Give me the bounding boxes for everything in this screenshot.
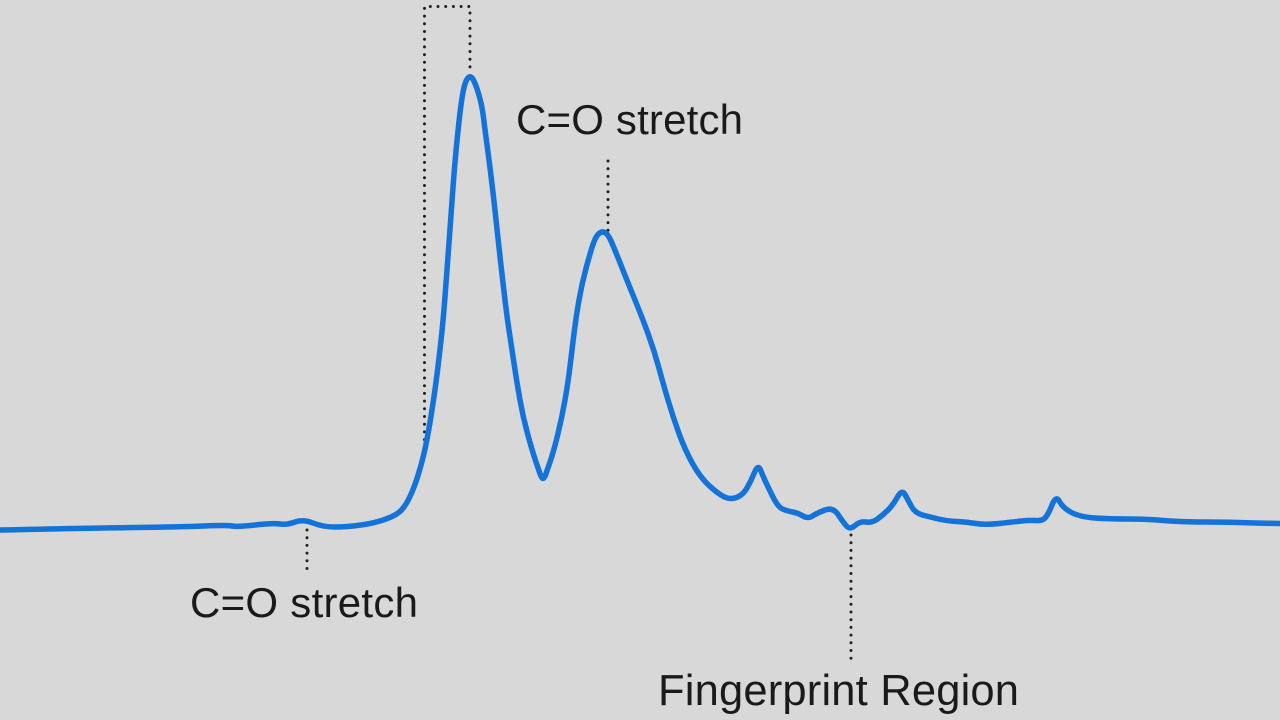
label: lower C=O stretch: C=O stretch [190,579,418,626]
dotted leader: upper C=O stretch [606,161,610,231]
dotted bracket above main peak [424,6,470,455]
spectrum line [0,77,1280,530]
label: fingerprint region: Fingerprint Region [658,667,1019,715]
label: upper C=O stretch: C=O stretch [516,96,743,143]
dotted leader: fingerprint region [850,535,852,661]
dotted leader: lower C=O stretch [306,530,308,570]
